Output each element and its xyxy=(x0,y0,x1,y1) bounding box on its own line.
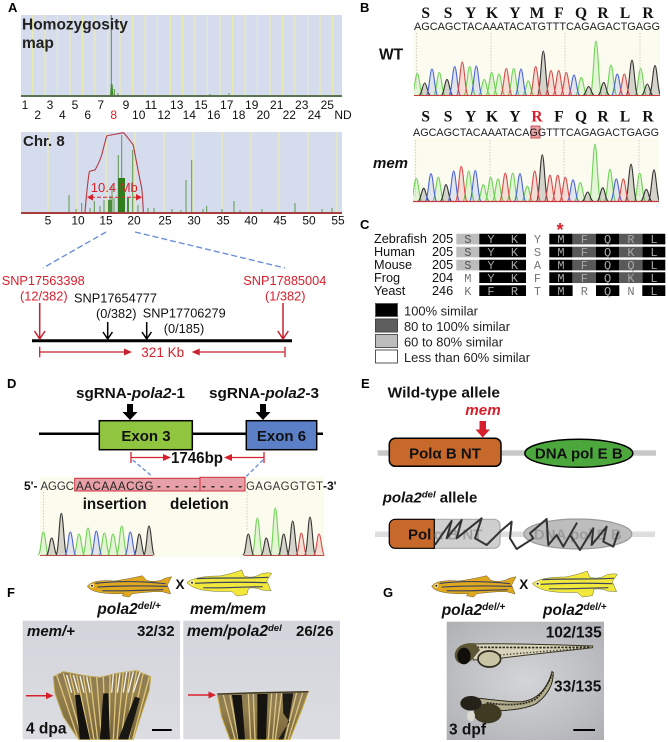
chromosome number axis: 5 xyxy=(72,98,79,112)
alignment residues: M xyxy=(464,272,471,286)
species names and positions: 246 xyxy=(432,284,453,298)
photo: mem/+ fin: 4 dpa xyxy=(26,720,67,738)
chromosome number axis: 14 xyxy=(183,108,196,122)
genotype labels: del/+ xyxy=(482,602,505,613)
mem amino acids: S xyxy=(421,108,430,126)
marker SNP17885004: SNP17885004 xyxy=(243,273,326,288)
alignment residues: F xyxy=(581,272,588,286)
species names and positions: Frog xyxy=(374,271,400,285)
zoom guide dashes xyxy=(43,232,285,268)
junction sequence: AGGC xyxy=(40,481,74,493)
photo: 3 dpf larvae xyxy=(447,622,604,740)
heading: Chr. 8: Chr. 8 xyxy=(23,133,65,150)
panel: F fin regeneration xyxy=(7,570,340,739)
alignment residues: F xyxy=(487,285,495,299)
WT label: WT xyxy=(379,46,404,64)
exon 6 xyxy=(246,421,317,450)
photo: mem/+ fin: 32/32 xyxy=(137,623,175,640)
chromosome number axis: 24 xyxy=(308,108,321,122)
mem amino acids: Q xyxy=(575,108,587,126)
mem amino acids: R xyxy=(597,108,609,126)
alignment residues: R xyxy=(511,285,518,299)
WT amino acids: K xyxy=(486,5,498,22)
alignment residues: Q xyxy=(604,272,611,286)
heading: Homozygosity map: Homozygosity xyxy=(22,16,128,34)
species names and positions: Yeast xyxy=(374,284,406,298)
panel letter F: F xyxy=(7,585,15,600)
photo: mem/pola2 del fin: mem/pola2 xyxy=(187,623,268,640)
genotype labels: pola2 xyxy=(96,601,138,618)
alignment residues: M xyxy=(557,246,565,260)
WT nucleotide sequence: AGCAGCTACAAATACATGTTTCAGAGACTGAGG xyxy=(414,21,660,33)
chromosome 8 axis in Mb: 50 xyxy=(302,214,316,228)
alignment residues: L xyxy=(650,259,658,273)
alignment residues: L xyxy=(650,285,658,299)
chromosome number axis: 9 xyxy=(123,98,130,112)
sgRNA labels: sgRNA-pola2-1 xyxy=(76,385,185,402)
zigzag frameshift line xyxy=(435,518,618,550)
gene structure: Exon 3 xyxy=(121,428,171,445)
panel letter A: A xyxy=(8,0,18,15)
alignment residues: L xyxy=(650,246,658,260)
alignment residues: Y xyxy=(534,233,541,247)
junction sequence: -3' xyxy=(323,479,337,493)
similarity legend: Less than 60% similar xyxy=(404,350,531,365)
alignment residues: L xyxy=(650,272,658,286)
chromosome 8 axis in Mb: 10 xyxy=(71,214,85,228)
WT amino acids: M xyxy=(530,5,545,22)
chromosome number axis: 4 xyxy=(59,108,66,122)
chromosome number axis: 15 xyxy=(194,98,208,112)
panel letter B: B xyxy=(360,0,369,15)
WT amino acids: Q xyxy=(575,5,587,22)
species names and positions: 205 xyxy=(432,258,453,272)
alignment residues xyxy=(464,233,658,299)
junction sequence: GAGAGGTGT xyxy=(246,481,323,493)
genotype labels xyxy=(96,601,266,618)
chromosome number axis xyxy=(22,98,352,122)
WT amino acids: R xyxy=(642,5,654,22)
mem amino acids: Y xyxy=(465,108,476,126)
alignment residues: T xyxy=(534,285,541,299)
panel letter C: C xyxy=(360,217,370,232)
chromosome number axis: 21 xyxy=(270,98,284,112)
chromosome 8 axis in Mb: 45 xyxy=(273,214,287,228)
photo: 3 dpf larvae: 3 dpf xyxy=(449,722,487,738)
genotype labels: del/+ xyxy=(138,601,161,612)
alignment residues: M xyxy=(557,272,565,286)
junction sequence: ----- xyxy=(202,481,242,493)
regeneration plane arrow xyxy=(26,695,48,697)
panel letter G: G xyxy=(383,585,393,600)
guide dashes xyxy=(133,460,263,477)
curved-tail larva xyxy=(460,672,553,723)
similarity legend: 100% similar xyxy=(404,304,479,319)
chart: genome-wide homozygosity map xyxy=(21,15,342,97)
similarity legend: 60 to 80% similar xyxy=(404,334,504,350)
alignment residues: M xyxy=(557,285,565,299)
chromosome number axis: 6 xyxy=(84,108,91,122)
exon 3 xyxy=(99,421,192,450)
mem amino acids: R xyxy=(531,108,543,126)
marker SNP17563398 xyxy=(2,273,85,304)
photo: mem/pola2 del fin: del xyxy=(268,623,282,634)
WT amino acids: F xyxy=(554,5,564,22)
alignment residues: S xyxy=(534,246,541,260)
recombinants 1/382: (1/382) xyxy=(265,289,306,304)
species names and positions: 205 xyxy=(432,245,453,259)
fish cross: X xyxy=(519,577,528,592)
junction sequence xyxy=(24,479,337,493)
heading: wild-type allele: Wild-type allele xyxy=(388,385,500,402)
species names and positions: 204 xyxy=(432,271,453,285)
alignment residues: S xyxy=(464,246,471,260)
alignment residues: A xyxy=(534,259,542,273)
alignment residues: F xyxy=(534,272,541,286)
heading: pola2 del allele: allele xyxy=(436,490,477,507)
alignment residues: R xyxy=(627,233,635,247)
chromosome 8 axis in Mb: 30 xyxy=(187,214,201,228)
alignment residues: F xyxy=(581,259,588,273)
marker SNP17706279: SNP17706279 xyxy=(143,306,226,321)
alignment residues: K xyxy=(464,285,472,299)
alignment residues: S xyxy=(464,259,471,273)
mem amino acids: F xyxy=(554,108,564,126)
deletion allele chromatogram: deletion xyxy=(170,496,229,513)
alignment residues: K xyxy=(511,272,519,286)
truncated protein diagram: Pol xyxy=(408,526,431,544)
chart: chromosome 8 map xyxy=(21,132,342,214)
panel: A homozygosity mapping xyxy=(2,0,352,360)
wild-type protein diagram: DNA pol E B xyxy=(535,446,623,462)
WT chromatogram xyxy=(379,5,661,97)
genotype labels: pola2 xyxy=(542,602,584,619)
chromosome number axis: 17 xyxy=(220,98,234,112)
genotype labels xyxy=(441,602,607,619)
mem mutation marker: mem xyxy=(465,402,501,419)
alignment residues: Y xyxy=(487,259,495,273)
alignment residues: S xyxy=(464,233,471,247)
alignment residues: Q xyxy=(604,233,611,247)
insertion and deletion labels: insertion xyxy=(83,496,147,513)
photo: 3 dpf larvae: 102/135 xyxy=(546,624,602,642)
chromosome number axis: 1 xyxy=(22,98,29,112)
genotype labels: pola2 xyxy=(441,602,483,619)
fine map of SNP markers xyxy=(2,273,326,360)
heading: Homozygosity map: map xyxy=(22,35,54,52)
mem amino acids: S xyxy=(444,108,452,126)
mem amino acids: L xyxy=(620,108,630,126)
recombinants 0/382: (0/382) xyxy=(96,306,137,321)
10.4 Mb interval: 10.4 Mb xyxy=(91,180,138,195)
mem nucleotide sequence: AGCAGCTACAAATACAGGTTTCAGAGACTGAGG xyxy=(413,127,659,139)
WT amino acids: Y xyxy=(509,5,521,22)
species names and positions: 205 xyxy=(432,232,453,246)
species names and positions: Human xyxy=(374,245,415,259)
alignment residues: M xyxy=(557,233,565,247)
panel: G larval phenotype xyxy=(383,571,617,740)
gene structure: Exon 6 xyxy=(257,428,306,445)
chromosome number axis: 16 xyxy=(207,108,221,122)
panel: E protein domains xyxy=(361,376,656,550)
fish cross xyxy=(432,571,617,597)
321 Kb interval: 321 Kb xyxy=(141,345,184,360)
similarity legend: 80 to 100% similar xyxy=(404,319,511,334)
chromosome number axis: 20 xyxy=(257,108,270,122)
chromosome number axis: 11 xyxy=(145,98,158,112)
photo: 3 dpf larvae: 33/135 xyxy=(554,678,602,696)
photo: mem/pola2 del fin xyxy=(183,621,340,739)
chromosome 8 axis in Mb: 35 xyxy=(216,214,230,228)
alignment residues: K xyxy=(627,246,635,260)
LOD curve xyxy=(85,133,143,212)
mem amino acids xyxy=(421,108,654,126)
heading: pola2 del allele: pola2 xyxy=(382,490,423,507)
alignment residues: Y xyxy=(487,246,495,260)
chromosome number axis: 23 xyxy=(295,98,309,112)
wild-type protein diagram: Polα B NT xyxy=(409,446,481,462)
species names and positions: Mouse xyxy=(374,258,412,272)
chromosome number axis: 25 xyxy=(321,98,334,112)
truncated protein diagram: α B NT xyxy=(434,526,482,544)
chromosome number axis: 13 xyxy=(170,98,184,112)
genotype labels: mem/mem xyxy=(190,601,266,618)
mem amino acids: Y xyxy=(509,108,521,126)
alignment residues: Y xyxy=(487,233,495,247)
alignment residues: K xyxy=(511,246,519,260)
sgRNA arrows xyxy=(122,404,270,420)
photo: mem/+ fin xyxy=(23,621,180,739)
panel letter E: E xyxy=(361,376,370,391)
panel: D CRISPR deletion design xyxy=(7,376,337,557)
chromosome 8 axis in Mb: 5 xyxy=(45,214,52,228)
junction sequence: ----- xyxy=(157,481,197,493)
scale bar xyxy=(573,729,595,731)
junction sequence: AACAAACGG xyxy=(76,481,154,493)
junction sequence: 5'- xyxy=(24,479,38,493)
recombinants 0/185: (0/185) xyxy=(164,321,204,336)
gene structure xyxy=(39,404,323,450)
chromosome number axis: 7 xyxy=(97,98,104,112)
321 Kb interval xyxy=(40,345,285,360)
panel letter D: D xyxy=(7,376,16,391)
sgRNA labels: sgRNA-pola2-3 xyxy=(209,385,319,402)
mem label: mem xyxy=(373,155,408,172)
alignment residues: F xyxy=(581,246,588,260)
fin tissue xyxy=(53,671,151,739)
truncated protein diagram xyxy=(375,518,655,550)
marker SNP17563398: (12/382) xyxy=(20,289,68,304)
chromosome number axis: 19 xyxy=(245,98,259,112)
mutated base highlight xyxy=(531,126,540,138)
1746 bp distance xyxy=(131,450,264,467)
alignment residues: Y xyxy=(487,272,495,286)
10.4 Mb interval xyxy=(87,180,142,201)
WT amino acids: L xyxy=(620,5,630,22)
photo: mem/+ fin: mem/+ xyxy=(27,623,75,640)
mem mutation marker xyxy=(465,402,501,438)
species names and positions xyxy=(374,232,453,298)
photo: mem/pola2 del fin: 26/26 xyxy=(296,623,334,640)
panel: C protein alignment xyxy=(360,217,665,365)
normal larva xyxy=(455,643,593,667)
alignment residues: K xyxy=(511,259,519,273)
conservation star: * xyxy=(556,220,564,240)
WT amino acids: S xyxy=(421,5,430,22)
highlighted indel region xyxy=(75,477,245,491)
alignment residues: N xyxy=(627,285,635,299)
panel: B sequencing chromatograms xyxy=(360,0,661,202)
alignment residues: F xyxy=(581,233,588,247)
alignment residues: K xyxy=(627,272,635,286)
sgRNA labels xyxy=(76,385,319,402)
chromosome 8 axis in Mb: 55 xyxy=(331,214,345,228)
map line xyxy=(32,339,292,342)
chromosome 8 axis in Mb: 15 xyxy=(99,214,113,228)
alignment residues: K xyxy=(511,233,519,247)
chromosome 8 axis in Mb: 40 xyxy=(244,214,258,228)
chromosome number axis: 12 xyxy=(157,108,171,122)
mem chromatogram xyxy=(373,108,660,202)
marker SNP17563398: SNP17563398 xyxy=(2,273,85,288)
chromosome number axis: 2 xyxy=(34,108,41,122)
species names and positions: Zebrafish xyxy=(374,232,427,246)
WT amino acids: Y xyxy=(465,5,476,22)
chromosome number axis: ND xyxy=(334,108,352,122)
heading: pola2 del allele: del xyxy=(422,490,436,501)
chromosome number axis: 22 xyxy=(283,108,296,122)
alignment residues: L xyxy=(650,233,658,247)
1746 bp distance: 1746bp xyxy=(171,450,223,467)
marker SNP17654777: SNP17654777 xyxy=(74,291,157,306)
chromosome number axis: 8 xyxy=(110,108,117,122)
alignment residues: R xyxy=(581,285,588,299)
mem amino acids: R xyxy=(642,108,654,126)
alignment cell shading xyxy=(456,234,665,296)
marker arrows xyxy=(34,303,288,339)
deletion allele chromatogram xyxy=(24,477,337,557)
wild-type protein diagram xyxy=(378,438,656,467)
chromosome 8 axis in Mb xyxy=(45,214,345,228)
fish cross: X xyxy=(175,577,185,592)
WT amino acids: S xyxy=(444,5,452,22)
chromosome number axis: 3 xyxy=(47,98,54,112)
genotype labels: del/+ xyxy=(583,602,607,613)
amputation plane arrow xyxy=(188,694,210,696)
fin stump xyxy=(217,692,308,739)
WT amino acids xyxy=(421,5,654,22)
mem amino acids: K xyxy=(486,108,498,126)
truncated protein diagram: DNA pol E B xyxy=(534,526,622,544)
WT amino acids: R xyxy=(597,5,609,22)
fish cross xyxy=(87,570,272,597)
chromosome number axis: 10 xyxy=(132,108,146,122)
alignment residues: M xyxy=(557,259,565,273)
alignment residues: Q xyxy=(627,259,635,273)
alignment residues: Q xyxy=(604,246,611,260)
sequencing traces xyxy=(38,508,324,556)
chromosome 8 axis in Mb: 20 xyxy=(127,214,141,228)
alignment residues: Q xyxy=(604,259,611,273)
similarity legend xyxy=(376,304,531,365)
scale bar xyxy=(152,729,172,731)
chromosome number axis: 18 xyxy=(232,108,246,122)
alignment residues: Q xyxy=(604,285,611,299)
chromosome 8 axis in Mb: 25 xyxy=(158,214,172,228)
